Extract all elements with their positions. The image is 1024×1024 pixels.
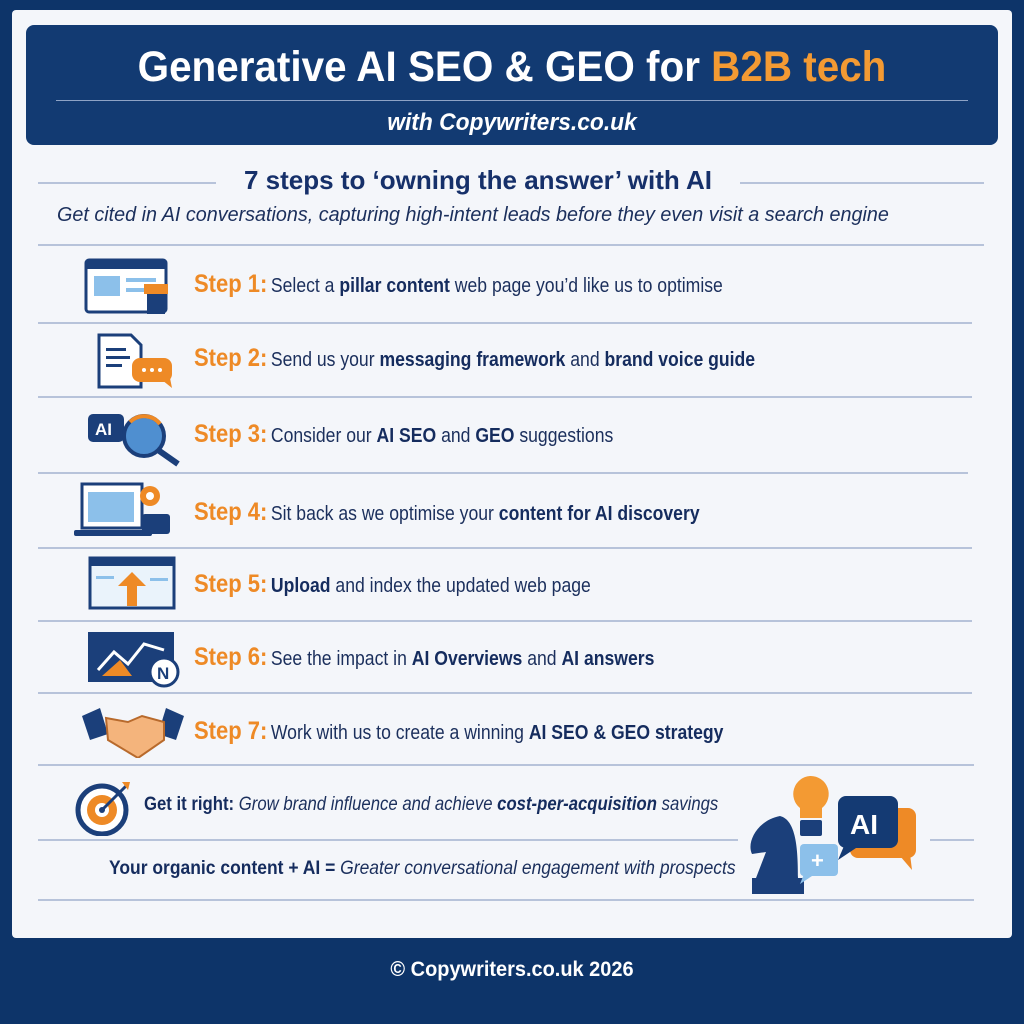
step 5: Step 5:Upload and index the updated web page (194, 570, 591, 598)
step 2: Step 2:Send us your messaging framework and brand voice guide (194, 344, 755, 372)
icon: chess knight, bulb, AI chat: + (811, 848, 824, 873)
icon: target (76, 782, 130, 836)
equation callout: Your organic content + AI = Greater conversational engagement with prospects (109, 858, 736, 879)
icon: document chat step2 (98, 334, 172, 388)
header banner (26, 25, 998, 145)
icon: handshake step7 (82, 708, 184, 758)
footer: © Copywriters.co.uk 2026 (390, 958, 634, 981)
step 6: Step 6:See the impact in AI Overviews and AI answers (194, 643, 654, 671)
step 4: Step 4:Sit back as we optimise your content for AI discovery (194, 498, 700, 526)
intro text: Get cited in AI conversations, capturing high-intent leads before they even visit a search engine (57, 204, 889, 226)
icon: AI globe step3 (88, 414, 180, 466)
subtitle: with Copywriters.co.uk (387, 109, 637, 136)
step 3: Step 3:Consider our AI SEO and GEO suggestions (194, 420, 613, 448)
icon: chart step6 (88, 632, 180, 688)
icon: chess knight, bulb, AI chat (750, 776, 916, 894)
icon: web page step1 (84, 258, 168, 314)
step 1: Step 1:Select a pillar content web page you’d like us to optimise (194, 270, 723, 298)
section heading: 7 steps to ‘owning the answer’ with AI (244, 165, 712, 195)
icon: laptop gear step4 (74, 482, 170, 536)
title: Generative AI SEO & GEO for B2B tech (138, 43, 886, 91)
icon: chart step6: N (157, 664, 169, 683)
get it right callout: Get it right: Grow brand influence and achieve cost-per-acquisition savings (144, 794, 718, 815)
icon: AI globe step3: AI (95, 420, 112, 439)
step 7: Step 7:Work with us to create a winning AI SEO & GEO strategy (194, 717, 723, 745)
icon: chess knight, bulb, AI chat: AI (850, 809, 878, 840)
icon: upload page step5 (88, 556, 176, 610)
